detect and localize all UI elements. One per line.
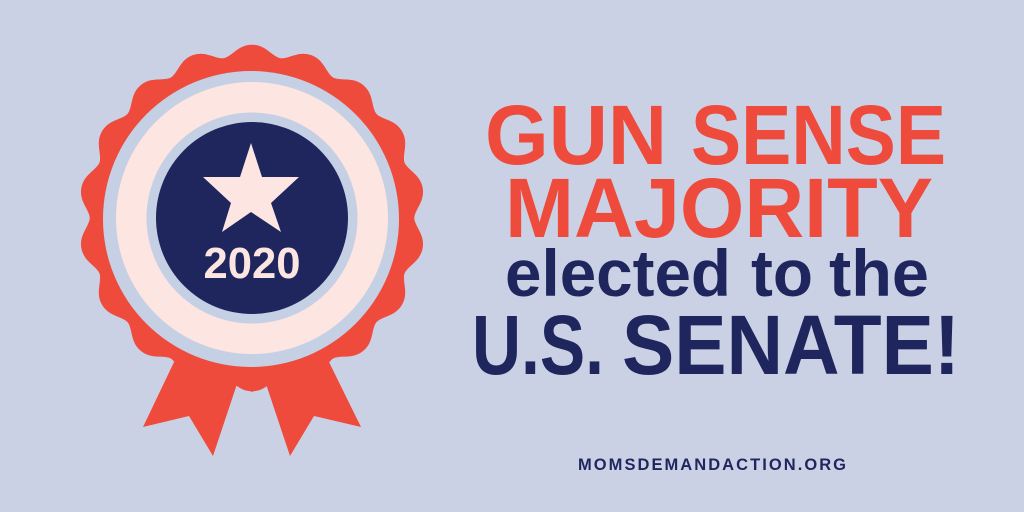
icon: star — [203, 143, 299, 232]
heading: gun sense — [485, 88, 946, 182]
subheading: elected to the: to — [751, 236, 813, 310]
pink ring — [116, 82, 388, 354]
heading: gun sense: SENSE — [691, 88, 946, 182]
heading: gun sense: GUN — [485, 88, 667, 182]
ribbon tails — [143, 360, 361, 456]
footer url: MOMSDEMANDACTION.ORG — [578, 456, 846, 474]
year label: 2020 — [204, 239, 300, 288]
navy disc — [156, 122, 348, 314]
heading: u.s. senate — [472, 298, 960, 392]
subheading: elected to the: elected — [505, 236, 731, 310]
scalloped edge — [77, 45, 427, 391]
subheading: elected to the: the — [829, 236, 929, 310]
heading: u.s. senate: U.S. — [472, 298, 604, 392]
heading: u.s. senate: SENATE! — [622, 298, 960, 392]
outer light ring — [103, 71, 399, 367]
inner light ring — [146, 112, 358, 324]
subheading: elected to the — [505, 236, 929, 310]
badge rosette — [77, 45, 427, 456]
heading: majority: MAJORITY — [505, 161, 933, 255]
